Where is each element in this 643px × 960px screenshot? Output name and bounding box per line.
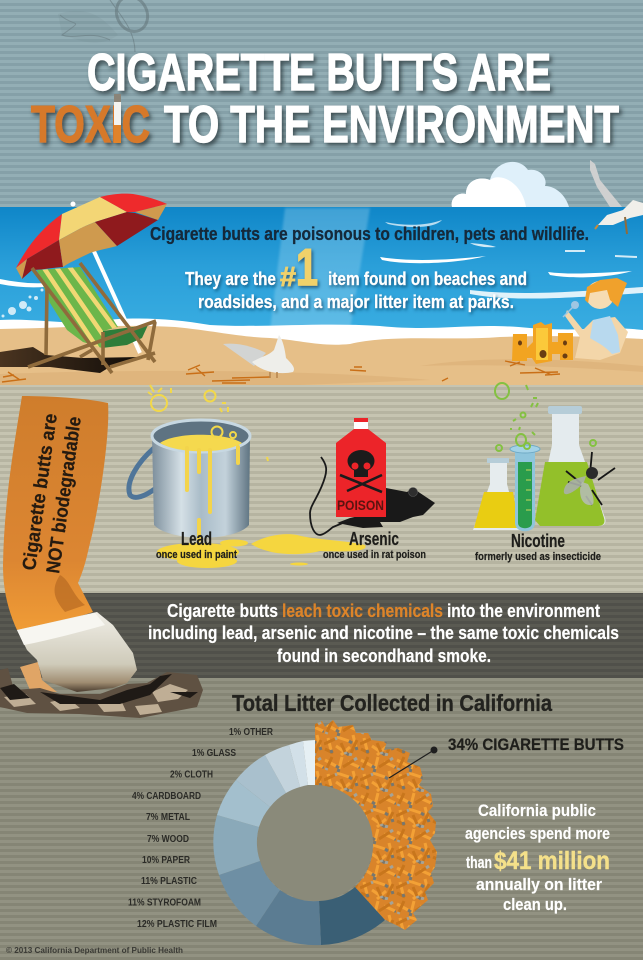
callout: clean up cost: California public xyxy=(478,802,596,820)
text: not biodegradable: NOT biodegradable xyxy=(43,415,86,575)
callout: clean up cost: than xyxy=(466,854,492,872)
title xyxy=(31,44,619,154)
icon: yellow bubbles xyxy=(148,385,268,461)
waves xyxy=(0,220,643,299)
foam droplets xyxy=(2,288,44,318)
text: nicotine: Nicotine xyxy=(511,531,565,551)
text: poisonous statement: Cigarette butts are poisonous to children, pets and wildlife. xyxy=(150,224,589,244)
chart labels: 11% STYROFOAM xyxy=(128,896,201,908)
ash pile xyxy=(0,668,203,718)
chart labels xyxy=(128,726,273,930)
callout: clean up cost xyxy=(465,802,610,914)
smoke wisp xyxy=(58,0,153,52)
chart title: Total Litter Collected in California xyxy=(232,690,552,716)
icon: green bubbles xyxy=(495,383,596,451)
text: leach statement: Cigarette butts xyxy=(167,601,278,621)
text: number one litter item: # xyxy=(280,261,296,292)
icon: large flask xyxy=(535,406,606,526)
slice: 7% metal xyxy=(236,755,286,807)
umbrella pole xyxy=(83,227,140,353)
text: number one litter item xyxy=(185,239,527,312)
sea sparkle xyxy=(270,208,370,330)
icon: poison bottle xyxy=(336,418,386,517)
text: number one litter item: roadsides, and a major litter item at parks. xyxy=(198,292,514,312)
icon: cigarette butt xyxy=(0,396,203,718)
panel: beach scene xyxy=(0,160,643,385)
callout: clean up cost: $41 million xyxy=(494,847,610,875)
chart labels: 12% PLASTIC FILM xyxy=(137,918,217,930)
donut hole xyxy=(257,785,373,901)
seagull flying xyxy=(590,160,643,234)
icon: fly xyxy=(564,452,615,505)
text: leach statement: leach toxic chemicals xyxy=(282,601,443,621)
text: lead: once used in paint xyxy=(156,549,237,561)
callout: 34% cigarette butts: 34% CIGARETTE BUTTS xyxy=(448,735,624,754)
slice: 2% cloth xyxy=(289,741,308,787)
chart labels: 7% METAL xyxy=(146,811,190,823)
text: leach statement: into the environment xyxy=(447,601,600,621)
icon: spilled paint xyxy=(157,534,366,568)
text: lead xyxy=(156,529,237,561)
girl xyxy=(563,278,628,360)
chart labels: 1% GLASS xyxy=(192,747,236,759)
slice: 10% paper xyxy=(213,815,260,875)
shore foam xyxy=(0,318,643,350)
burnt paper xyxy=(20,662,57,692)
icon: cigarette in title xyxy=(114,94,121,143)
donut chart xyxy=(213,720,438,945)
text: arsenic xyxy=(323,529,426,561)
text: nicotine: formerly used as insecticide xyxy=(475,551,601,563)
skull and crossbones xyxy=(340,450,382,492)
slice: 4% cardboard xyxy=(265,745,300,793)
icon: small flask xyxy=(473,458,519,530)
text: number one litter item: item found on beaches and xyxy=(328,269,527,289)
deck chair xyxy=(28,262,156,373)
footer credit: © 2013 California Department of Public Health xyxy=(6,946,183,955)
chart labels: 10% PAPER xyxy=(142,854,190,866)
cloud xyxy=(452,162,569,207)
text: arsenic: once used in rat poison xyxy=(323,549,426,561)
slice: 11% plastic xyxy=(219,861,280,926)
slice: 34% cigarette butts xyxy=(315,720,437,930)
title: TOXIC xyxy=(31,96,150,154)
panel: dark band xyxy=(0,593,643,678)
slice: 1% glass and other xyxy=(303,740,315,785)
text: not biodegradable: Cigarette butts are xyxy=(19,412,62,572)
litter on sand xyxy=(2,361,560,383)
callout: clean up cost: agencies spend more xyxy=(465,825,610,843)
chart labels: 1% OTHER xyxy=(229,726,273,738)
slice: 11% styrofoam xyxy=(256,890,321,945)
callout: clean up cost: clean up. xyxy=(503,896,567,914)
icon: paint bucket xyxy=(129,420,250,540)
text: not biodegradable xyxy=(19,412,86,575)
text: leach statement: found in secondhand smoke. xyxy=(277,646,491,666)
slice: 7% wood xyxy=(217,780,270,827)
slice: 12% plastic film xyxy=(319,887,385,945)
chart labels: 11% PLASTIC xyxy=(141,875,197,887)
icon: test tube xyxy=(510,445,540,531)
sand castle xyxy=(512,322,573,364)
chart labels: 7% WOOD xyxy=(147,833,189,845)
text: number one litter item: 1 xyxy=(296,239,318,297)
chair shadow xyxy=(0,347,140,373)
seagull on sand xyxy=(223,335,294,378)
text: lead: Lead xyxy=(181,529,212,549)
callout: clean up cost: annually on litter xyxy=(476,876,603,894)
umbrella canopy xyxy=(16,194,167,279)
icon: poison bottle: POISON xyxy=(337,497,384,513)
text: number one litter item: They are the xyxy=(185,269,276,289)
text: leach statement xyxy=(148,601,619,666)
icon: rat xyxy=(310,457,435,535)
text: nicotine xyxy=(475,531,601,563)
chart labels: 2% CLOTH xyxy=(170,768,213,780)
text: arsenic: Arsenic xyxy=(349,529,399,549)
chart labels: 4% CARDBOARD xyxy=(132,790,201,802)
sand xyxy=(0,326,643,385)
leader line xyxy=(389,746,438,778)
